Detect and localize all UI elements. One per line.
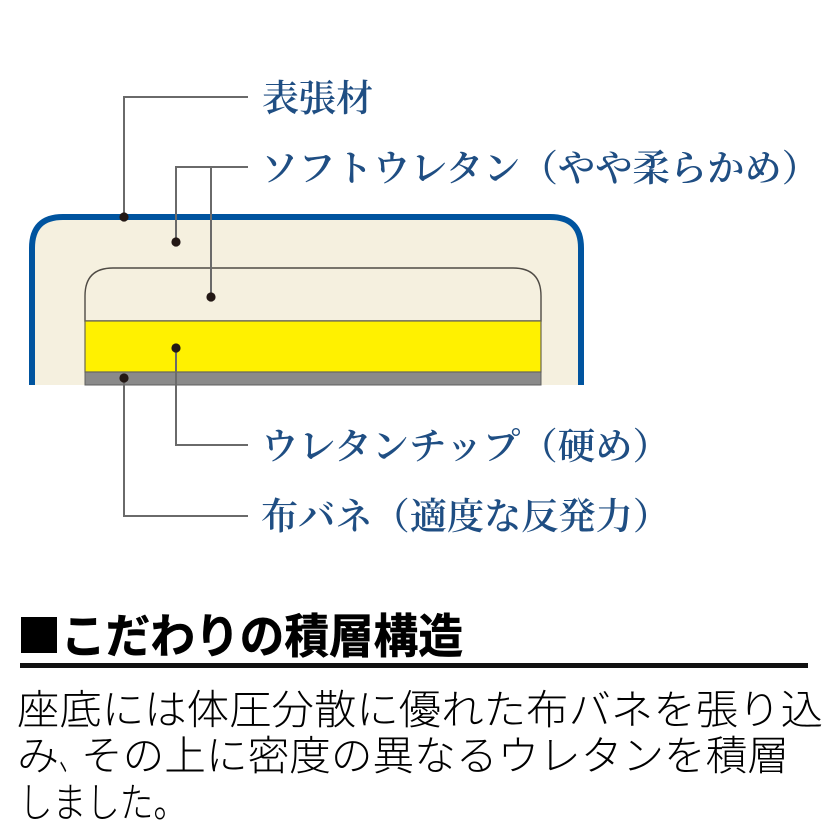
leader lines [124,97,248,516]
body text: み [17,733,59,779]
cross-section diagram [32,217,581,385]
heading square [21,617,57,653]
body text [17,687,823,826]
heading rule [20,663,808,668]
heading text: こだわりの積層構造 [61,610,463,663]
cloth spring layer [85,372,541,385]
body text: しました。 [19,780,187,826]
label: cover material: 表張材 [262,78,373,120]
label: cloth spring: 布バネ（適度な反発力） [261,496,670,538]
body text: その上に密度の異なるウレタンを積層 [81,733,789,779]
soft urethane layer [85,268,541,321]
outer upholstery layer [32,217,581,385]
label: soft urethane: ソフトウレタン（やや柔らかめ） [261,148,819,190]
body text: 、 [59,733,81,779]
urethane chip layer [85,321,541,372]
leader dots [119,212,216,383]
label: urethane chip: ウレタンチップ（硬め） [261,427,670,468]
blue cover outline [32,217,581,385]
heading [21,610,463,663]
body text: 座底には体圧分散に優れた布バネを張り込 [17,687,823,733]
